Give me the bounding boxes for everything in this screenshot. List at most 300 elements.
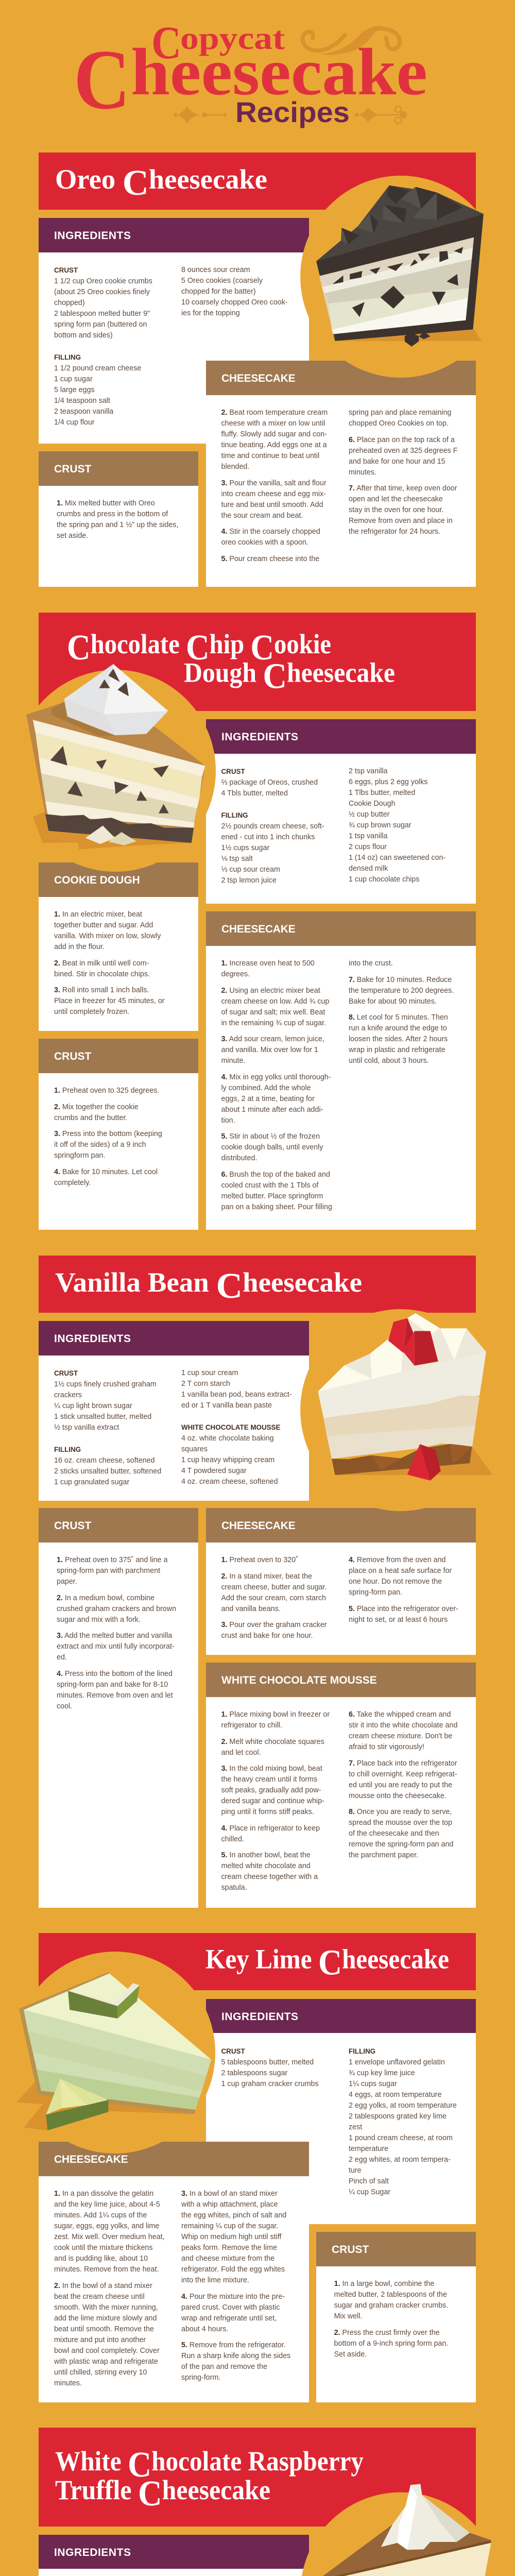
text: cookie dough directions: until completely frozen. [54, 1008, 129, 1016]
text: mousse steps column 2: mousse onto the cheesecake. [349, 1792, 447, 1800]
heading: crust: CRUST [332, 2244, 369, 2256]
panel: vanilla bean ingredients [39, 1321, 309, 1500]
text: crust and filling ingredients: FILLING [221, 811, 248, 819]
text: crust and filling ingredients: ½ tsp vanilla extract [54, 1423, 119, 1432]
text: steps column 1: bowl and cool completely. Cover [54, 2347, 160, 2355]
panel: key lime crust steps [316, 2232, 476, 2402]
text: filling ingredients: 4 eggs, at room temperature [349, 2091, 441, 2099]
text: more ingredients: ies for the topping [181, 309, 240, 317]
text: steps column 1: crust and bake for one hour. [221, 1632, 313, 1640]
text: crust directions: crumbs and press in the bottom of [57, 510, 168, 518]
heading: cookie dough [39, 862, 198, 896]
text: crust directions: ed. [57, 1653, 67, 1662]
text: steps column 1: add the lime mixture slowly and [54, 2314, 157, 2323]
text: crust and filling ingredients: CRUST [221, 768, 245, 775]
panel: key lime ingredients [206, 1999, 476, 2224]
text: crust ingredients: 1 cup graham cracker crumbs [221, 2080, 319, 2088]
heading: cheesecake [39, 2142, 309, 2176]
banner: White Chocolate Raspberry Truffle Cheesecake [39, 2428, 476, 2527]
text: mousse steps column 1: refrigerator to chill. [221, 1721, 282, 1730]
banner: Key Lime Cheesecake: C [318, 1943, 342, 1983]
text: steps column 1: cook until the mixture thickens [54, 2244, 153, 2252]
heading: crust [39, 1039, 198, 1073]
text: steps column 2: stay in the oven for one hour. [349, 506, 443, 514]
text: crust ingredients: CRUST [221, 2047, 245, 2055]
text: steps column 1: 1. Preheat oven to 320˚ [221, 1556, 298, 1564]
text: filling ingredients: 2 egg yolks, at room temperature [349, 2102, 457, 2110]
text: crust and filling ingredients: ⅔ package of Oreos, crushed [221, 778, 318, 787]
text: crust directions: 1. Preheat oven to 375˚ and line a [57, 1556, 167, 1564]
text: crust directions: sugar and mix with a fork. [57, 1616, 141, 1624]
text: crust directions: it off of the sides) of a 9 inch [54, 1141, 146, 1149]
text: steps column 2: Bake for about 90 minutes. [349, 997, 437, 1006]
text: cookie dough directions: vanilla. With mixer on low, slowly [54, 932, 161, 940]
text: steps column 1: with plastic wrap and refrigerate [54, 2358, 158, 2366]
text: steps column 2: and cheese mixture from the [181, 2255, 274, 2263]
text: steps column 1: tinue beating. Add eggs one at a [221, 441, 327, 449]
heading word: Copycat: opycat [180, 21, 285, 56]
banner: Key Lime Cheesecake [39, 1933, 476, 1990]
heading: crust: CRUST [54, 1050, 91, 1062]
text: steps column 2: chopped Oreo Cookies on top. [349, 419, 449, 428]
text: steps column 1: beat until smooth. Remove the [54, 2325, 154, 2333]
text: more ingredients: 1 tsp vanilla [349, 832, 387, 840]
text: steps column 2: the refrigerator for 24 hours. [349, 528, 440, 536]
text: more ingredients: 1 cup chocolate chips [349, 875, 419, 884]
text: steps column 2: one hour. Do not remove the [349, 1578, 442, 1586]
text: crust and filling ingredients: 1 cup sugar [54, 375, 93, 383]
text: crust and filling ingredients: 16 oz. cream cheese, softened [54, 1456, 155, 1465]
text: steps column 2: run a knife around the edge to [349, 1024, 447, 1032]
text: steps column 2: of the pan and remove the [181, 2363, 267, 2371]
text: cookie dough directions: bined. Stir in chocolate chips. [54, 970, 150, 978]
text: steps column 2 [349, 1556, 458, 1624]
heading: cheesecake: CHEESECAKE [221, 372, 295, 384]
text: steps column 2: 5. Place into the refrigerator over- [349, 1605, 458, 1613]
text: steps column 1: and the key lime juice, about 4-5 [54, 2200, 160, 2209]
text: steps column 2: spring pan and place remaining [349, 409, 451, 417]
text: steps column 2: 4. Pour the mixture into the pre- [181, 2293, 285, 2301]
text: crust directions: 3. Add the melted butter and vanilla [57, 1632, 172, 1640]
text: mousse steps column 1: cream cheese together with a [221, 1873, 318, 1881]
text: crust ingredients [221, 2047, 319, 2088]
text: crust directions: the spring pan and 1 ½" up the sides, [57, 521, 178, 529]
banner: White Chocolate Raspberry Truffle Cheesecake: hocolate Raspberry [151, 2446, 364, 2477]
text: cookie dough directions: together butter and sugar. Add [54, 921, 153, 929]
text: crust and filling ingredients: 5 large eggs [54, 386, 95, 394]
text: mousse steps column 1: 3. In the cold mixing bowl, beat [221, 1765, 322, 1773]
text: crust and filling ingredients: ened - cut into 1 inch chunks [221, 833, 315, 841]
left ornament [174, 106, 226, 124]
text: steps column 2: 4. Remove from the oven and [349, 1556, 445, 1564]
text: steps column 1: 4. Mix in egg yolks until thorough- [221, 1073, 331, 1081]
text: crust and filling ingredients: 2 teaspoon vanilla [54, 408, 113, 416]
text: crust and filling ingredients: ⅓ cup sour cream [221, 866, 280, 874]
panel: Oreo ingredients [39, 218, 309, 444]
heading: cheesecake: CHEESECAKE [221, 923, 295, 935]
text: steps column 1: mixture and put into another [54, 2336, 146, 2344]
title: Copycat Cheesecake Recipes [74, 21, 427, 128]
text: filling ingredients: zest [349, 2123, 362, 2131]
text: mousse steps column 2: cream cheese mixture. Don't be [349, 1732, 452, 1740]
text: steps column 2: night to set, or at least 6 hours [349, 1616, 448, 1624]
panel: chocolate chip cheesecake steps [206, 911, 476, 1230]
text: steps column 1: 4. Stir in the coarsely chopped [221, 528, 320, 536]
text: steps column 1: and vanilla. Mix over low for 1 [221, 1046, 318, 1054]
heading: ingredients [206, 1999, 476, 2033]
text: mousse steps column 1: 4. Place in refrigerator to keep [221, 1824, 320, 1833]
text: more ingredients: Cookie Dough [349, 800, 396, 808]
text: steps column 1: cheese with a mixer on low until [221, 419, 325, 428]
heading: ingredients [39, 2535, 309, 2569]
banner: Oreo Cheesecake [39, 152, 476, 209]
text: more ingredients and mousse: 2 T corn starch [181, 1380, 230, 1388]
text: mousse steps column 1: chilled. [221, 1835, 244, 1843]
heading: cheesecake: CHEESECAKE [221, 1520, 295, 1532]
panel: vanilla bean cheesecake steps [206, 1508, 476, 1655]
banner: White Chocolate Raspberry Truffle Cheesecake: White [55, 2446, 128, 2477]
text: steps column 1: 3. Pour the vanilla, salt and flour [221, 479, 327, 487]
heading: ingredients: INGREDIENTS [54, 2547, 131, 2558]
heading: cheesecake: CHEESECAKE [54, 2154, 128, 2165]
text: more ingredients and mousse: WHITE CHOCOLATE MOUSSE [181, 1423, 280, 1431]
text: mousse steps column 1: 1. Place mixing bowl in freezer or [221, 1710, 330, 1719]
text: crust and filling ingredients: 4 Tbls butter, melted [221, 789, 288, 798]
text: cookie dough directions: 3. Roll into small 1 inch balls. [54, 986, 149, 994]
text: cookie dough directions [54, 910, 165, 1016]
text: crust and filling ingredients: 2 tablespoon melted butter 9" [54, 310, 150, 318]
illustration: white chocolate raspberry cheesecake slice [302, 2484, 491, 2576]
banner: Vanilla Bean Cheesecake: heesecake [243, 1267, 362, 1298]
heading: cheesecake [206, 1508, 476, 1543]
illustration: Oreo cheesecake slice [300, 176, 484, 378]
text: crust directions: crushed graham crackers and brown [57, 1605, 176, 1613]
text: crust directions [57, 499, 178, 540]
banner: Oreo Cheesecake: Oreo [55, 164, 115, 195]
text: more ingredients and mousse [181, 1369, 292, 1486]
banner: Vanilla Bean Cheesecake: C [216, 1266, 243, 1306]
text: crust and filling ingredients: 1½ cups sugar [221, 844, 269, 852]
text: crust directions: 1. Preheat oven to 325 degrees. [54, 1087, 159, 1095]
banner: Chocolate Chip Cookie Dough Cheesecake: Dough [184, 657, 263, 688]
text: steps column 1: and vanilla beans. [221, 1605, 281, 1613]
text: crust and filling ingredients: 2 tsp lemon juice [221, 876, 277, 885]
text: crust directions [54, 1087, 162, 1187]
text: more ingredients and mousse: squares [181, 1445, 208, 1453]
heading: crust: CRUST [54, 463, 91, 475]
text: more ingredients [349, 767, 445, 884]
text: filling ingredients: FILLING [349, 2047, 375, 2055]
text: crust and filling ingredients: FILLING [54, 1446, 81, 1453]
illustration: chocolate chip cookie dough cheesecake slice [26, 664, 216, 872]
text: crust directions: 2. Mix together the cookie [54, 1103, 139, 1111]
text: crust directions: bottom of a 9-inch spring form pan. [334, 2340, 448, 2348]
text: mousse steps column 2: 8. Once you are ready to serve, [349, 1808, 452, 1816]
text: crust directions: sugar and graham cracker crumbs. [334, 2301, 448, 2310]
banner: White Chocolate Raspberry Truffle Cheesecake: C [128, 2445, 151, 2485]
text: steps column 2: 5. Remove from the refrigerator. [181, 2341, 286, 2349]
text: crust directions: springform pan. [54, 1151, 105, 1160]
swirl flourish [303, 26, 400, 55]
text: mousse steps column 1 [221, 1710, 330, 1892]
heading word: Cheesecake: C [74, 32, 130, 127]
text: steps column 1: fluffy. Slowly add sugar and con- [221, 430, 327, 438]
text: steps column 1: eggs, 2 at a time, beating for [221, 1095, 315, 1103]
text: crust and filling ingredients: 1 cup granulated sugar [54, 1478, 129, 1486]
text: crust directions [334, 2280, 448, 2359]
text: filling ingredients: 2 tablespoons grated key lime [349, 2112, 447, 2121]
text: mousse steps column 1: dered sugar and continue whip- [221, 1797, 324, 1805]
text: more ingredients and mousse: ed or 1 T vanilla bean paste [181, 1401, 272, 1410]
text: steps column 2: wrap in plastic and refrigerate [349, 1046, 445, 1054]
text: steps column 1: 1. Increase oven heat to 500 [221, 959, 315, 968]
text: crust and filling ingredients: 1 1/2 cup Oreo cookie crumbs [54, 277, 152, 285]
text: steps column 1: minutes. Remove from the heat. [54, 2265, 159, 2274]
text: mousse steps column 1: 2. Melt white chocolate squares [221, 1738, 324, 1746]
text: mousse steps column 1: ping until it forms stiff peaks. [221, 1808, 314, 1816]
text: cookie dough directions: Place in freezer for 45 minutes, or [54, 997, 165, 1005]
text: steps column 1: cream cheese on low. Add ¾ cup [221, 997, 329, 1006]
text: steps column 1: 3. Pour over the graham cracker [221, 1621, 327, 1629]
text: crust and filling ingredients [54, 266, 152, 427]
text: crust directions: minutes. Remove from oven and let [57, 1691, 173, 1700]
text: steps column 1: oreo cookies with a spoon. [221, 538, 308, 547]
text: crust and filling ingredients: (about 25 Oreo cookies finely [54, 288, 150, 296]
text: filling ingredients: ture [349, 2166, 362, 2175]
text: crust directions: 2. Press the crust firmly over the [334, 2329, 440, 2337]
text: steps column 2: 8. Let cool for 5 minutes. Then [349, 1013, 448, 1022]
text: crust and filling ingredients: ¼ cup light brown sugar [54, 1402, 132, 1410]
text: steps column 1: Add the sour cream, corn starch [221, 1594, 326, 1602]
text: crust and filling ingredients: 2 sticks unsalted butter, softened [54, 1467, 161, 1476]
banner: Oreo Cheesecake: C [123, 163, 149, 203]
text: crust directions: 2. In a medium bowl, combine [57, 1594, 154, 1602]
right ornament [355, 106, 406, 124]
text: more ingredients and mousse: 1 cup sour cream [181, 1369, 238, 1377]
text: steps column 2: into the lime mixture. [181, 2276, 249, 2284]
text: steps column 1: melted butter. Place springform [221, 1192, 323, 1200]
heading: cheesecake [206, 361, 476, 395]
heading: crust [39, 1508, 198, 1543]
text: crust and filling ingredients: 1½ cups finely crushed graham [54, 1380, 157, 1388]
text: mousse steps column 2: afraid to stir vigorously! [349, 1743, 424, 1751]
text: steps column 2: minutes. [349, 468, 376, 477]
text: steps column 1 [221, 409, 328, 563]
text: steps column 1: 2. Beat room temperature cream [221, 409, 328, 417]
text: steps column 1: minutes. Add 1¼ cups of the [54, 2211, 147, 2219]
banner: Chocolate Chip Cookie Dough Cheesecake: hip [210, 628, 250, 659]
text: crust and filling ingredients: crackers [54, 1391, 82, 1399]
banner: White Chocolate Raspberry Truffle Cheesecake: heesecake [162, 2475, 270, 2505]
text: crust ingredients: 5 tablespoons butter, melted [221, 2058, 314, 2066]
text: steps column 1: degrees. [221, 970, 250, 978]
text: steps column 2: the egg whites, pinch of salt and [181, 2211, 286, 2219]
text: crust and filling ingredients: CRUST [54, 266, 78, 274]
text: steps column 1 [54, 2190, 165, 2387]
text: crust directions: spring-form pan with parchment [57, 1567, 160, 1575]
text: crust and filling ingredients: 1 1/2 pound cream cheese [54, 364, 141, 372]
text: filling ingredients [349, 2047, 457, 2196]
text: more ingredients: densed milk [349, 865, 388, 873]
banner: Vanilla Bean Cheesecake [39, 1256, 476, 1313]
heading: ingredients: INGREDIENTS [54, 1333, 131, 1345]
text: steps column 2: refrigerator. Fold the egg whites [181, 2265, 285, 2274]
text: steps column 1: beat the cream cheese until [54, 2293, 145, 2301]
panel: Oreo crust steps [39, 451, 198, 587]
text: crust and filling ingredients: bottom and sides) [54, 331, 113, 340]
text: steps column 1: 2. Using an electric mixer beat [221, 987, 320, 995]
text: cookie dough directions: add in the flour. [54, 943, 105, 951]
banner: Chocolate Chip Cookie Dough Cheesecake: C [186, 628, 210, 667]
text: filling ingredients: 1 pound cream cheese, at room [349, 2134, 453, 2142]
text: mousse steps column 2: the parchment paper. [349, 1851, 418, 1859]
text: crust directions: extract and mix until fully incorporat- [57, 1642, 175, 1651]
text: more ingredients: 1 (14 oz) can sweetened con- [349, 854, 445, 862]
text: steps column 2: spring-form. [181, 2374, 220, 2382]
panel: white chocolate raspberry ingredients [39, 2535, 309, 2576]
text: steps column 1: in the remaining ¾ cup of sugar. [221, 1019, 326, 1027]
text: steps column 2: remaining ¼ cup of the sugar. [181, 2222, 278, 2230]
text: mousse steps column 2: remove the spring-form pan and [349, 1840, 453, 1849]
text: more ingredients: 10 coarsely chopped Oreo cook- [181, 298, 288, 307]
text: steps column 2: with a whip attachment, place [181, 2200, 278, 2209]
text: crust directions: completely. [54, 1179, 91, 1187]
text: crust directions: spring-form pan and bake for 8-10 [57, 1681, 168, 1689]
text: crust directions: 1. Mix melted butter with Oreo [57, 499, 155, 507]
text: steps column 2: 7. Bake for 10 minutes. Reduce [349, 976, 452, 984]
text: steps column 1: and is pudding like, about 10 [54, 2255, 148, 2263]
banner: Key Lime Cheesecake: Key Lime [205, 1944, 322, 1975]
text: more ingredients: chopped for the batter) [181, 287, 256, 296]
text: steps column 2: pared crust. Cover with plastic [181, 2303, 280, 2312]
text: steps column 1: 5. Pour cream cheese into the [221, 555, 319, 563]
text: steps column 2: 7. After that time, keep oven door [349, 484, 457, 493]
banner: Key Lime Cheesecake: heesecake [342, 1944, 449, 1975]
text: steps column 2: open and let the cheesecake [349, 495, 443, 503]
text: steps column 1: cooled crust with the 1 Tbls of [221, 1181, 318, 1190]
banner: Chocolate Chip Cookie Dough Cheesecake: hocolate [91, 628, 186, 659]
text: steps column 1: 5. Stir in about ½ of the frozen [221, 1132, 320, 1141]
text: steps column 1: into cream cheese and egg mix- [221, 490, 326, 498]
text: crust directions: Mix well. [334, 2312, 362, 2320]
text: crust and filling ingredients: 1/4 teaspoon salt [54, 397, 110, 405]
heading: ingredients: INGREDIENTS [221, 2011, 299, 2023]
text: crust directions: paper. [57, 1578, 77, 1586]
text: steps column 1: distributed. [221, 1154, 257, 1162]
text: steps column 1: 1. In a pan dissolve the gelatin [54, 2190, 153, 2198]
text: crust directions: 4. Press into the bottom of the lined [57, 1670, 173, 1678]
text: steps column 1: cream cheese, butter and sugar. [221, 1583, 327, 1591]
text: crust directions: 1. In a large bowl, combine the [334, 2280, 434, 2288]
text: more ingredients: 6 eggs, plus 2 egg yolks [349, 778, 427, 786]
text: filling ingredients: ¾ cup key lime juice [349, 2069, 415, 2077]
banner: Chocolate Chip Cookie Dough Cheesecake: C [67, 628, 91, 667]
text: crust directions: set aside. [57, 532, 88, 540]
banner: White Chocolate Raspberry Truffle Cheesecake: C [138, 2474, 162, 2514]
text: crust directions [57, 1556, 176, 1710]
text: more ingredients and mousse: 4 oz. white chocolate baking [181, 1434, 274, 1443]
text: steps column 1 [221, 959, 332, 1211]
text: mousse steps column 2: stir it into the white chocolate and [349, 1721, 457, 1730]
heading word: Recipes: Recipes [235, 96, 350, 128]
text: filling ingredients: temperature [349, 2145, 388, 2153]
text: steps column 2: into the crust. [349, 959, 393, 968]
heading: crust [316, 2232, 476, 2266]
text: more ingredients and mousse: 4 oz. cream cheese, softened [181, 1478, 278, 1486]
banner: Oreo Cheesecake: heesecake [149, 164, 267, 195]
text: steps column 2: and bake for one hour and 15 [349, 457, 445, 466]
heading: ingredients: INGREDIENTS [54, 230, 131, 242]
text: crust and filling ingredients: 1 stick unsalted butter, melted [54, 1413, 151, 1421]
text: more ingredients [181, 266, 288, 317]
text: filling ingredients: 1 envelope unflavored gelatin [349, 2058, 445, 2066]
text: steps column 2: peaks form. Remove the lime [181, 2244, 277, 2252]
text: mousse steps column 2: 6. Take the whipped cream and [349, 1710, 451, 1719]
banner: Vanilla Bean Cheesecake: Vanilla Bean [55, 1267, 207, 1298]
text: more ingredients: ¾ cup brown sugar [349, 821, 411, 829]
heading: white chocolate mousse [206, 1663, 476, 1697]
text: filling ingredients: 2 egg whites, at room tempera- [349, 2156, 451, 2164]
text: steps column 2: Remove from oven and place in [349, 517, 453, 525]
text: crust directions: 4. Bake for 10 minutes. Let cool [54, 1168, 158, 1176]
panel: cookie dough steps [39, 862, 198, 1031]
heading: white chocolate mousse: WHITE CHOCOLATE MOUSSE [221, 1674, 377, 1686]
illustration: key lime cheesecake slice [16, 1952, 215, 2154]
banner: White Chocolate Raspberry Truffle Cheesecake: Truffle [55, 2475, 138, 2505]
text: crust and filling ingredients: 2½ pounds cream cheese, soft- [221, 822, 324, 831]
banner: Chocolate Chip Cookie Dough Cheesecake [39, 613, 476, 711]
banner: Chocolate Chip Cookie Dough Cheesecake: C [250, 628, 274, 667]
heading: crust [39, 451, 198, 485]
text: cookie dough directions: 2. Beat in milk until well com- [54, 959, 149, 968]
text: steps column 2 [181, 2190, 290, 2382]
heading: cookie dough: COOKIE DOUGH [54, 874, 140, 886]
text: more ingredients: ½ cup butter [349, 810, 389, 819]
text: crust and filling ingredients: CRUST [54, 1369, 78, 1377]
text: more ingredients: 2 tsp vanilla [349, 767, 387, 775]
text: more ingredients: 2 cups flour [349, 843, 387, 851]
heading word: Cheesecake: heesecake [131, 35, 427, 109]
text: steps column 2: Whip on medium high until stiff [181, 2233, 281, 2241]
text: steps column 1: ture and beat until smooth. Add [221, 501, 323, 509]
banner: Chocolate Chip Cookie Dough Cheesecake: heesecake [287, 657, 395, 688]
text: steps column 1: blended. [221, 463, 249, 471]
text: crust ingredients: 2 tablespoons sugar [221, 2069, 287, 2077]
text: more ingredients: 5 Oreo cookies (coarsely [181, 277, 263, 285]
text: steps column 2: preheated oven at 325 degrees F [349, 447, 457, 455]
text: mousse steps column 2: spread the mousse over the top [349, 1819, 452, 1827]
text: steps column 1: 2. In the bowl of a stand mixer [54, 2282, 152, 2290]
text: steps column 1: 3. Add sour cream, lemon juice, [221, 1035, 324, 1043]
text: mousse steps column 2: ed until you are ready to put the [349, 1781, 452, 1789]
text: steps column 1 [221, 1556, 327, 1640]
text: steps column 1: 6. Brush the top of the baked and [221, 1171, 330, 1179]
text: steps column 1: minute. [221, 1057, 245, 1065]
text: steps column 2: about 4 hours. [181, 2325, 228, 2333]
text: crust directions: Set aside. [334, 2350, 367, 2359]
heading: ingredients: INGREDIENTS [221, 731, 299, 743]
text: steps column 1: time and continue to beat until [221, 452, 319, 460]
text: steps column 1: the sour cream and beat. [221, 512, 303, 520]
text: steps column 2 [349, 959, 454, 1065]
text: steps column 2 [349, 409, 457, 536]
text: mousse steps column 2 [349, 1710, 457, 1859]
text: crust directions: 3. Press into the bottom (keeping [54, 1130, 162, 1138]
text: mousse steps column 2: of the cheesecake and then [349, 1829, 439, 1838]
text: crust directions: crumbs and the butter. [54, 1114, 127, 1122]
text: steps column 1: tion. [221, 1116, 235, 1125]
text: mousse steps column 1: spatula. [221, 1884, 247, 1892]
